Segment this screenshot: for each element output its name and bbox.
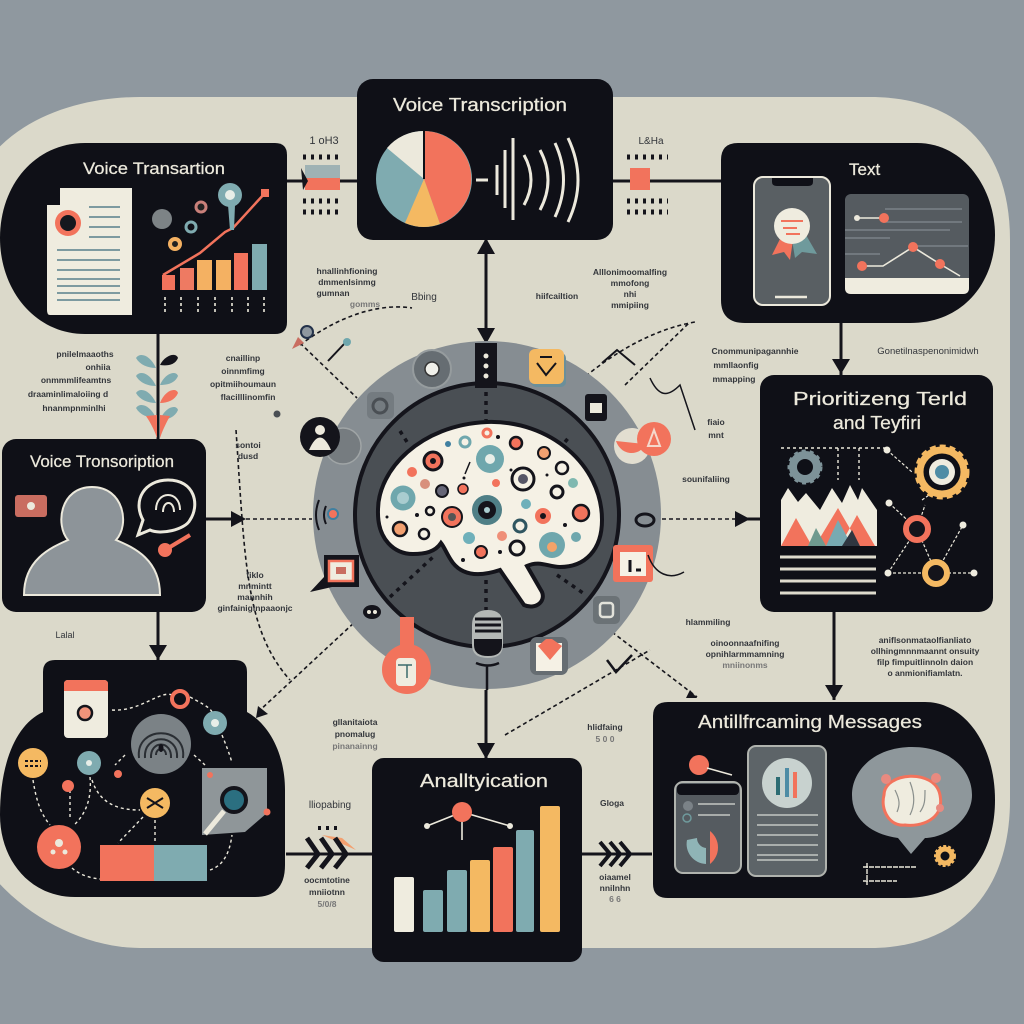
small captions: 6 6 bbox=[609, 894, 621, 904]
small captions: hnallinhfioning bbox=[317, 266, 377, 276]
small captions: ollhingmnnmaannt onsuity bbox=[871, 646, 980, 656]
small captions: mniiotnn bbox=[309, 887, 345, 897]
small captions: oinoonnaafnifing bbox=[711, 638, 779, 648]
small captions: filp fimpuitlinnoln daion bbox=[877, 657, 973, 667]
microphone bbox=[472, 610, 503, 690]
small gear bbox=[935, 846, 955, 866]
heading: Prioritizeng Terld bbox=[793, 389, 967, 409]
pie chart bbox=[376, 125, 472, 227]
document badge bbox=[64, 680, 108, 738]
small captions: nnilnhn bbox=[600, 883, 630, 893]
central hub disc bbox=[300, 0, 671, 694]
brain bubble bbox=[852, 747, 972, 854]
connector arrows bbox=[149, 181, 850, 854]
gear icon bbox=[789, 451, 821, 483]
small captions: mniinonms bbox=[722, 660, 768, 670]
leaf stem bbox=[136, 355, 178, 438]
small captions: mnt bbox=[708, 430, 724, 440]
report card bbox=[748, 746, 826, 876]
small captions: oiaamel bbox=[599, 872, 631, 882]
panel: voice tronscription profile bbox=[2, 439, 206, 612]
small captions: Bbing bbox=[411, 292, 437, 303]
small captions: Gonetilnaspenonimidwh bbox=[877, 346, 979, 357]
small captions: mmofong bbox=[611, 278, 649, 288]
small captions: fiaio bbox=[707, 417, 725, 427]
small captions: mmipiing bbox=[611, 300, 649, 310]
heading: and Teyfiri bbox=[833, 413, 921, 433]
small captions: hnanmpnminlhi bbox=[42, 403, 106, 413]
small captions: dusd bbox=[238, 451, 258, 461]
timeline marks bbox=[863, 863, 917, 885]
small captions: oinnmfimg bbox=[221, 366, 265, 376]
small captions: hiifcailtion bbox=[536, 291, 578, 301]
small captions: pnomalug bbox=[335, 729, 375, 739]
small captions: draaminlimaloiing d bbox=[28, 389, 108, 399]
small captions: ginfainiginpaaonjc bbox=[217, 603, 293, 613]
small captions: hlidfaing bbox=[587, 722, 623, 732]
small captions: mmapping bbox=[713, 374, 755, 384]
panel: messages bbox=[653, 702, 995, 898]
small captions: L&Ha bbox=[638, 136, 664, 147]
small captions: mnmintt bbox=[238, 581, 272, 591]
small captions: 5 0 0 bbox=[596, 734, 615, 744]
small captions: Cnommunipagannhie bbox=[712, 346, 799, 356]
trend bar chart bbox=[162, 189, 269, 313]
small captions: o anmionifiamlatn. bbox=[887, 668, 963, 678]
small captions: fiklo bbox=[246, 570, 264, 580]
small captions: opnihlarmmamning bbox=[706, 649, 784, 659]
brain bbox=[378, 0, 602, 607]
phone card bbox=[675, 755, 741, 873]
small captions: aniflsonmataolfianliato bbox=[879, 635, 971, 645]
person icon bbox=[24, 487, 160, 595]
small captions: Alllonimoomalfing bbox=[593, 267, 667, 277]
top left ticker chart bbox=[301, 157, 341, 212]
speech bubble bbox=[138, 480, 195, 557]
panel: text bbox=[721, 143, 995, 323]
fingerprint bbox=[131, 714, 191, 774]
hub icons bbox=[300, 349, 671, 694]
pin markers bbox=[292, 326, 695, 672]
small captions: gumnan bbox=[316, 288, 350, 298]
dotted links bbox=[33, 694, 232, 879]
small captions: lliopabing bbox=[309, 800, 351, 811]
panel: prioritizing trend bbox=[760, 375, 993, 612]
small captions: sounifaliing bbox=[682, 474, 730, 484]
heading: Voice Transcription bbox=[393, 95, 567, 115]
document icon bbox=[47, 188, 132, 315]
panel: top left voice transcription bbox=[0, 143, 287, 334]
small captions: onmmmlifeamtns bbox=[41, 375, 111, 385]
small captions: 1 oH3 bbox=[309, 135, 339, 147]
magnifier card bbox=[202, 768, 270, 835]
chevrons left bbox=[307, 828, 356, 868]
node diagram bbox=[424, 802, 513, 840]
small captions: 5/0/8 bbox=[318, 899, 337, 909]
small captions: nhi bbox=[624, 289, 636, 299]
brain nodes bbox=[380, 0, 589, 562]
icon dots bbox=[152, 183, 242, 249]
small captions: flacilllinomfin bbox=[221, 392, 275, 402]
heading: Antillfrcaming Messages bbox=[698, 712, 922, 732]
small captions: onhiia bbox=[85, 362, 111, 372]
small captions: dmmenlsinmg bbox=[318, 277, 376, 287]
small captions: gllanitaiota bbox=[333, 717, 378, 727]
small captions: cnaillinp bbox=[226, 353, 260, 363]
small captions: mmllaonfig bbox=[713, 360, 759, 370]
small captions: pnilelmaaoths bbox=[56, 349, 114, 359]
heading: Text bbox=[849, 160, 880, 179]
top right ticker chart bbox=[627, 157, 668, 212]
small captions: oocmtotine bbox=[304, 875, 350, 885]
top notched connector bbox=[475, 343, 497, 388]
panel: network bbox=[0, 660, 285, 897]
mountain chart bbox=[780, 485, 877, 593]
line chart bbox=[845, 194, 969, 294]
panel: top centre voice transcription bbox=[357, 79, 613, 240]
heading: Voice Transartion bbox=[83, 159, 225, 178]
sound wave bbox=[476, 138, 578, 222]
chevrons right bbox=[600, 842, 630, 866]
small captions: gomms bbox=[350, 299, 380, 309]
chat badge bbox=[15, 495, 47, 517]
small captions: sontoi bbox=[235, 440, 261, 450]
small captions: mannhih bbox=[237, 592, 273, 602]
phone icon bbox=[754, 177, 830, 305]
small captions: pinanainng bbox=[332, 741, 378, 751]
radial dashes bbox=[390, 392, 583, 610]
small captions: hlammiling bbox=[686, 617, 730, 627]
small captions: Lalal bbox=[55, 630, 75, 640]
heading: Voice Tronsoription bbox=[30, 452, 174, 471]
small captions: opitmiihoumaun bbox=[210, 379, 276, 389]
heading: Analltyication bbox=[420, 771, 548, 791]
small captions bbox=[28, 135, 980, 909]
bar chart bbox=[394, 806, 560, 932]
network of gears bbox=[884, 446, 978, 584]
panel: analyfication chart bbox=[372, 758, 582, 962]
colour bar bbox=[100, 845, 207, 881]
node icons bbox=[18, 691, 227, 869]
dotted guides bbox=[781, 448, 887, 480]
small captions: Gloga bbox=[600, 798, 624, 808]
